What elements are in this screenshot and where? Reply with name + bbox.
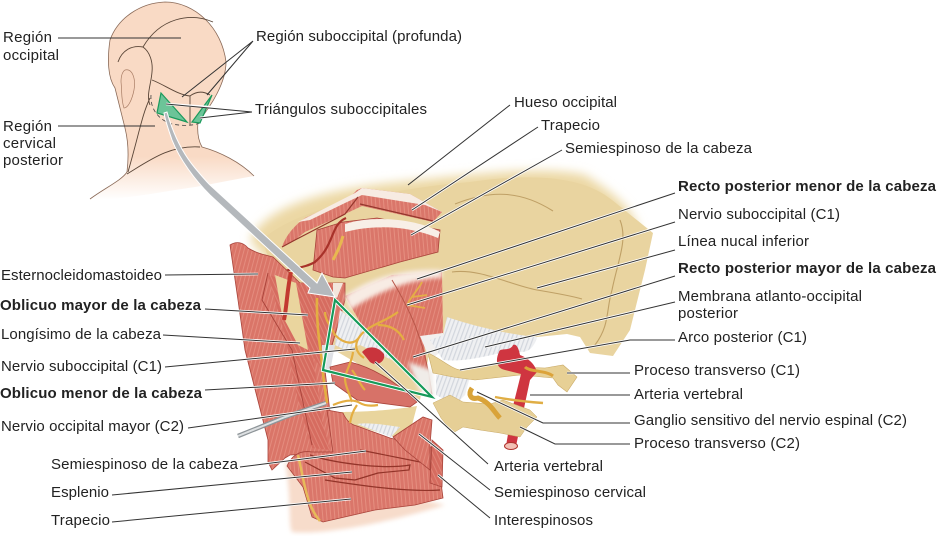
labels: bottom center: Interespinosos bbox=[494, 512, 593, 529]
labels: right column bbox=[514, 94, 937, 452]
labels: right column: Arteria vertebral bbox=[634, 386, 743, 403]
labels: bottom center bbox=[494, 458, 646, 529]
nerve branch bbox=[407, 282, 427, 308]
greater occipital nerve descending bbox=[298, 455, 320, 521]
muscle: semispinalis capitis upper bbox=[282, 218, 440, 278]
deep region below triangle: C2 spine and ligament bbox=[340, 406, 417, 437]
labels: left column bbox=[0, 267, 239, 529]
labels: left column: Oblicuo mayor de la cabeza bbox=[0, 297, 202, 314]
muscle: obliquus capitis superior bbox=[300, 283, 343, 370]
spinal ganglion and nerves bbox=[470, 367, 553, 418]
labels: head locator: Región suboccipital (profunda) bbox=[256, 28, 462, 45]
nerves: suboccipital and greater occipital bbox=[317, 298, 404, 423]
labels: right column: Recto posterior menor de la cabeza bbox=[678, 178, 937, 195]
skull: occipital bone bbox=[250, 171, 653, 400]
vertebral artery in triangle bbox=[362, 347, 384, 364]
labels: right column: Hueso occipital bbox=[514, 94, 617, 111]
muscle: trapezius cut edge bbox=[282, 188, 442, 247]
suboccipital triangle left bbox=[157, 93, 187, 122]
labels: left column: Esternocleidomastoideo bbox=[1, 267, 162, 284]
labels: head locator: Región bbox=[3, 118, 52, 135]
ear bbox=[121, 70, 135, 108]
vertebra C1: posterior arch and transverse process bbox=[428, 353, 577, 392]
labels: right column: Recto posterior mayor de la cabeza bbox=[678, 260, 937, 277]
occipital artery bbox=[282, 218, 346, 272]
muscle: rectus capitis posterior major and minor bbox=[345, 270, 443, 396]
labels: left column: Semiespinoso de la cabeza bbox=[51, 456, 239, 473]
triangle floor bbox=[322, 310, 392, 372]
dashed suboccipital boundary bbox=[151, 95, 200, 125]
labels: right column: Línea nucal inferior bbox=[678, 233, 809, 250]
labels: right column: Proceso transverso (C1) bbox=[634, 362, 800, 379]
labels: right column: Proceso transverso (C2) bbox=[634, 435, 800, 452]
labels: right column: Trapecio bbox=[541, 117, 600, 134]
muscle: semispinalis cervicis and interspinales bbox=[393, 417, 443, 487]
labels: bottom center: Semiespinoso cervical bbox=[494, 484, 646, 501]
labels: right column: Nervio suboccipital (C1) bbox=[678, 206, 840, 223]
labels: right column: Ganglio sensitivo del nervio espinal (C2) bbox=[634, 412, 907, 429]
region boundary lines bbox=[118, 18, 213, 174]
labels: head locator: Triángulos suboccipitales bbox=[255, 101, 427, 118]
leader lines bbox=[58, 38, 675, 522]
muscle: obliquus capitis inferior bbox=[330, 347, 417, 407]
bone ridge lines bbox=[452, 194, 623, 345]
labels: left column: Esplenio bbox=[51, 484, 109, 501]
labels: left column: Nervio occipital mayor (C2) bbox=[1, 418, 184, 435]
labels: head locator bbox=[3, 28, 462, 169]
labels: right column: Semiespinoso de la cabeza bbox=[565, 140, 753, 157]
curved grey arrow bbox=[164, 112, 335, 297]
muscle: sternocleidomastoid and lateral mass bbox=[230, 243, 345, 470]
vertebra C2 bbox=[433, 395, 537, 437]
labels: left column: Longísimo de la cabeza bbox=[1, 326, 162, 343]
labels: left column: Nervio suboccipital (C1) bbox=[1, 358, 162, 375]
labels: head locator: posterior bbox=[3, 152, 63, 169]
labels: head locator: cervical bbox=[3, 135, 56, 152]
labels: bottom center: Arteria vertebral bbox=[494, 458, 603, 475]
vertebral artery bbox=[497, 345, 537, 450]
green suboccipital triangle bbox=[323, 300, 432, 397]
muscle: lower neck layers bbox=[285, 410, 445, 533]
artery bbox=[284, 272, 291, 320]
labels: left column: Trapecio bbox=[51, 512, 110, 529]
labels: right column: Membrana atlanto-occipital bbox=[678, 288, 862, 305]
labels: head locator: Región bbox=[3, 29, 52, 46]
labels: head locator: occipital bbox=[3, 47, 59, 64]
suboccipital triangle right bbox=[192, 95, 212, 123]
cream bone strip bbox=[275, 275, 308, 350]
surgical forceps bbox=[238, 403, 326, 436]
yellow nerve bbox=[333, 236, 343, 260]
labels: right column: Arco posterior (C1) bbox=[678, 329, 807, 346]
atlanto-occipital membrane bbox=[430, 317, 537, 405]
labels: left column: Oblicuo menor de la cabeza bbox=[0, 385, 203, 402]
illustration: head and neck locator bbox=[88, 2, 254, 200]
labels: right column: posterior bbox=[678, 305, 738, 322]
